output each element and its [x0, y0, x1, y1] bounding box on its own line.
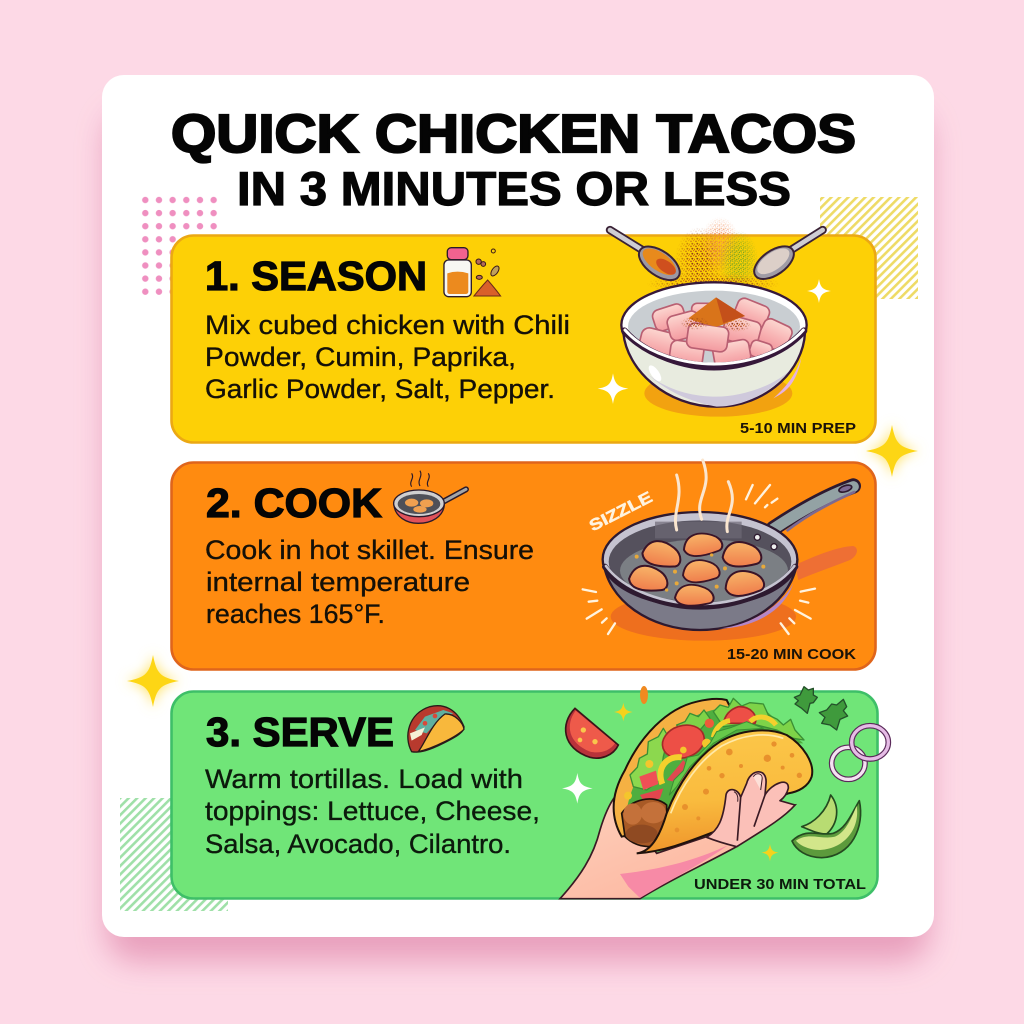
illustration: skillet with chicken	[583, 460, 857, 641]
text: serve instructions: Warm tortillas. Load with	[205, 764, 523, 794]
icon: salt shaker and spices	[444, 248, 501, 297]
tomato	[658, 720, 709, 763]
panel: cook	[172, 460, 876, 670]
sparkles	[598, 279, 831, 404]
text: cook instructions: reaches 165°F.	[206, 599, 385, 629]
decor: yellow hatch	[820, 197, 918, 299]
text: season instructions: Mix cubed chicken with Chili	[205, 310, 570, 340]
lettuce top	[713, 698, 804, 740]
panel: season	[172, 217, 876, 442]
spice cloud	[650, 218, 778, 290]
text: season instructions: Powder, Cumin, Paprika,	[205, 342, 516, 372]
skillet body	[603, 560, 797, 630]
meat	[622, 799, 667, 847]
main card	[102, 75, 934, 937]
sizzle text: SIZZLE	[587, 489, 656, 535]
title: IN 3 MINUTES OR LESS	[237, 162, 791, 215]
sparkle: left glow	[126, 654, 180, 708]
title	[171, 104, 856, 215]
text: season instructions: Garlic Powder, Salt, Pepper.	[205, 374, 555, 404]
decor: pink dot grid	[138, 194, 220, 298]
text: serve instructions	[205, 764, 540, 859]
decor: green hatch	[120, 798, 228, 911]
text: season instructions	[205, 310, 570, 404]
label: prep time: 5-10 MIN PREP	[740, 420, 856, 437]
text: cook instructions: internal temperature	[206, 567, 470, 597]
fingers	[707, 772, 795, 847]
cheese	[661, 757, 682, 784]
shell front	[637, 730, 812, 853]
infographic	[91, 75, 945, 977]
steam	[675, 460, 732, 532]
heading: season: 1. SEASON	[205, 253, 427, 299]
hand and arm	[560, 797, 795, 899]
bowl front	[623, 333, 805, 407]
skillet handle	[773, 484, 855, 531]
illustration: hand holding taco with toppings	[560, 686, 888, 899]
illustration: bowl with spices	[598, 217, 831, 417]
bowl back	[621, 282, 807, 368]
text: serve instructions: toppings: Lettuce, Cheese,	[205, 796, 540, 826]
cilantro	[794, 687, 848, 730]
spoon: right	[749, 230, 823, 285]
label: total time: UNDER 30 MIN TOTAL	[694, 876, 866, 893]
sparkle: right glow	[865, 424, 919, 478]
skillet front lip	[605, 567, 795, 607]
label: cook time: 15-20 MIN COOK	[727, 646, 856, 663]
panel: serve	[172, 686, 888, 899]
spice pile	[688, 297, 745, 327]
lettuce front	[669, 722, 763, 795]
heading: serve: 3. SERVE	[206, 709, 394, 755]
spoon: left	[610, 230, 686, 287]
title: QUICK CHICKEN TACOS	[171, 104, 856, 164]
text: cook instructions: Cook in hot skillet. Ensure	[205, 535, 534, 565]
chicken pieces	[628, 531, 765, 606]
tomato wedge	[566, 708, 618, 758]
avocado	[792, 795, 861, 858]
onion rings	[832, 726, 888, 779]
icon: small taco	[408, 706, 464, 752]
text: serve instructions: Salsa, Avocado, Cilantro.	[205, 829, 511, 859]
sparkles and pill	[562, 686, 779, 861]
card shadow	[106, 110, 930, 962]
text: cook instructions	[205, 535, 534, 629]
chicken cubes	[637, 296, 794, 367]
taco	[614, 698, 812, 853]
heading: cook: 2. COOK	[206, 480, 382, 526]
sizzle rays	[583, 485, 815, 634]
icon: small skillet	[394, 471, 466, 523]
